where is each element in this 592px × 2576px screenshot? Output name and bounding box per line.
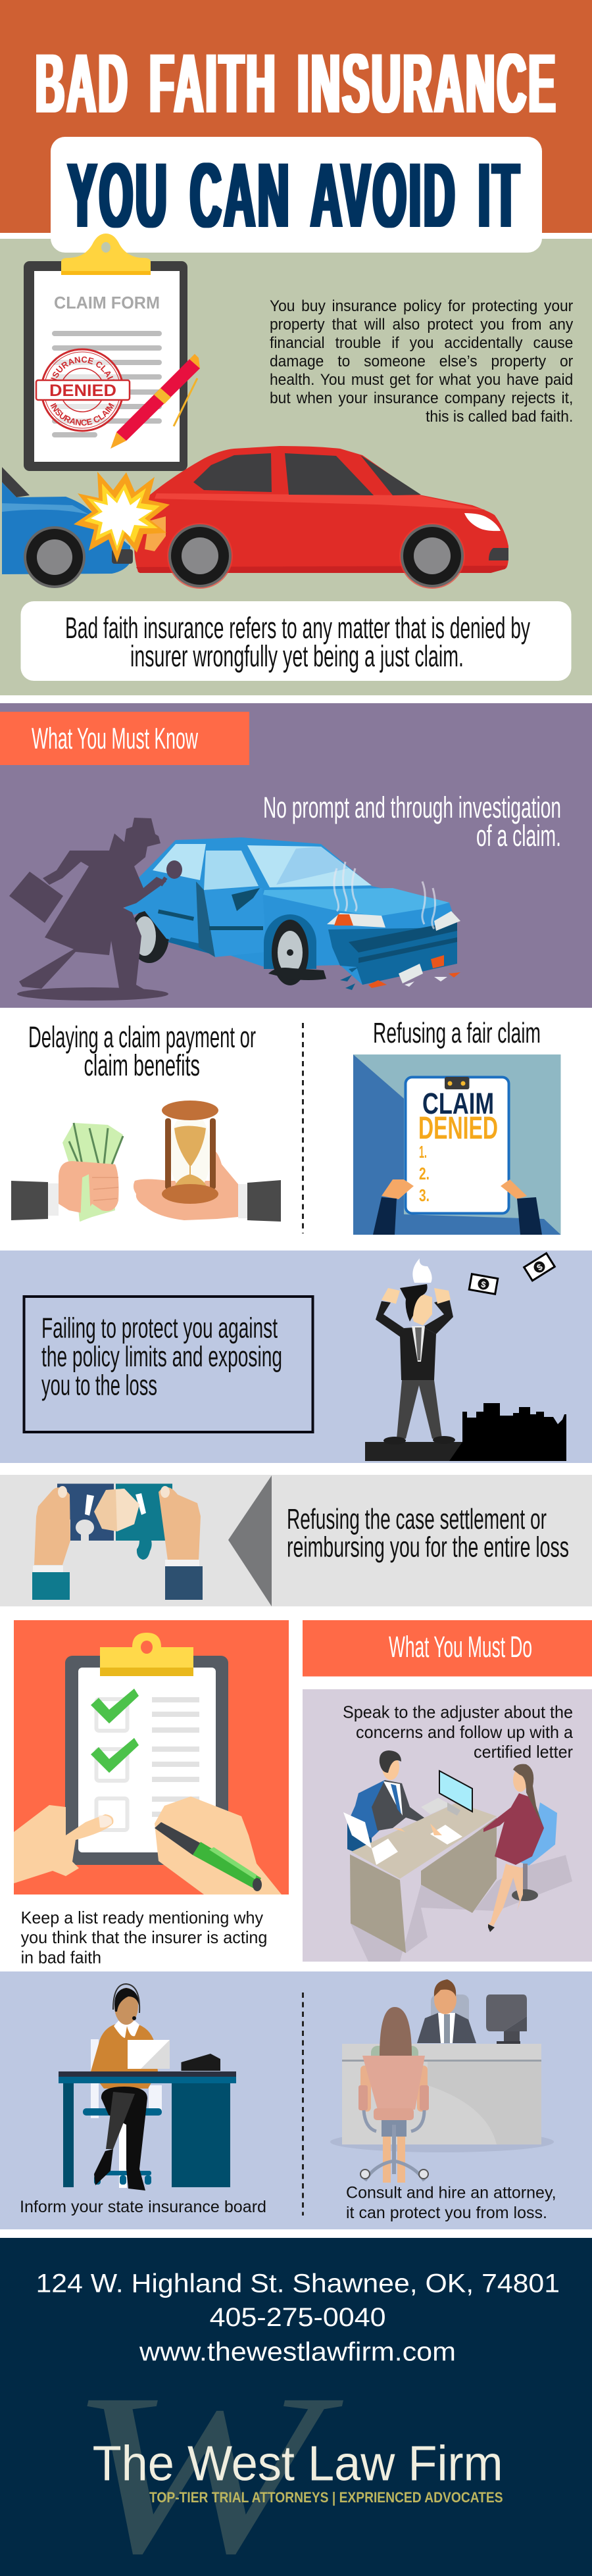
adjuster text: concerns and follow up with a — [356, 1722, 574, 1742]
contact details: 124 W. Highland St. Shawnee, OK, 74801 — [36, 2269, 560, 2298]
callout box: Failing to protect you against — [41, 1312, 278, 1345]
icon: woman at desk — [59, 1984, 236, 2191]
contact details: www.thewestlawfirm.com — [139, 2338, 456, 2367]
icon: blue car — [2, 467, 133, 588]
list caption: in bad faith — [21, 1948, 101, 1968]
icon: claim denied board — [353, 1054, 560, 1235]
icon: claim denied board: DENIED — [418, 1111, 498, 1146]
delay heading: Delaying a claim payment or — [28, 1020, 256, 1054]
adjuster text: Speak to the adjuster about the — [343, 1702, 573, 1721]
panel: footer — [0, 2238, 592, 2576]
consult caption: Consult and hire an attorney, — [346, 2184, 556, 2202]
panel: claim form and car crash — [0, 137, 592, 695]
icon: office meeting — [343, 1750, 572, 1962]
adjuster text: certified letter — [474, 1742, 573, 1762]
logo: tagline: TOP-TIER TRIAL ATTORNEYS | EXPRIENCED ADVOCATES — [149, 2489, 503, 2506]
icon: claim denied board: 2. — [419, 1164, 430, 1183]
icon: flying banknotes: $ — [535, 1262, 545, 1273]
icon: denied stamp — [36, 349, 130, 432]
contact details — [36, 2269, 560, 2367]
section heading — [303, 1620, 592, 1676]
intro text: You buy insurance policy for protecting your — [270, 297, 573, 315]
icon: claim denied board: 1. — [419, 1142, 427, 1162]
intro text: health. You must get for what you have paid — [270, 371, 573, 389]
panel: what you must do — [303, 1620, 592, 1962]
icon: red car — [134, 446, 508, 589]
icon: hand with money — [11, 1123, 123, 1222]
arrow: grey triangle — [228, 1475, 272, 1606]
icon: clipboard checklist — [65, 1633, 228, 1865]
inform caption: Inform your state insurance board — [20, 2198, 266, 2216]
section heading — [0, 712, 249, 765]
panel: keep a list — [14, 1620, 289, 1968]
adjuster text — [343, 1702, 574, 1762]
icon: flying banknotes — [469, 1253, 555, 1294]
icon: detective silhouette — [9, 818, 182, 1001]
panel: what you must know — [0, 703, 592, 1008]
list caption: you think that the insurer is acting — [21, 1927, 267, 1947]
settlement text — [287, 1503, 569, 1563]
callout box — [24, 1297, 313, 1432]
icon: clipboard claim form: CLAIM FORM — [54, 293, 160, 312]
header panel — [0, 0, 592, 233]
panel: refusing settlement — [0, 1475, 592, 1606]
icon: wrecked blue car — [121, 837, 460, 990]
intro text — [270, 297, 592, 429]
icon: denied stamp: DENIED — [49, 382, 116, 400]
intro text: property that will also protect you from any — [270, 316, 573, 334]
icon: claim denied board: 3. — [419, 1185, 430, 1205]
delay heading: claim benefits — [84, 1049, 200, 1082]
icon: denied stamp: INSURANCE CLAIM — [51, 357, 114, 380]
investigation text — [263, 791, 561, 853]
consult caption: it can protect you from loss. — [346, 2204, 547, 2222]
divider: dashed line — [302, 1993, 304, 2216]
divider: dashed line — [302, 1023, 304, 1233]
icon: collision burst — [74, 472, 170, 562]
icon: hands with pen — [14, 1796, 282, 1895]
panel: refusing a fair claim — [353, 1017, 560, 1235]
icon: pen — [111, 354, 200, 449]
panel: delaying a claim payment — [11, 1020, 281, 1222]
icon: attorney consultation — [330, 1979, 554, 2183]
list caption — [21, 1908, 267, 1968]
list caption: Keep a list ready mentioning why — [21, 1908, 263, 1927]
icon: flying banknotes: $ — [480, 1279, 487, 1290]
icon: hand with hourglass — [134, 1101, 281, 1222]
icon: denied stamp: INSURANCE CLAIM — [50, 403, 114, 426]
callout box: the policy limits and exposing — [41, 1341, 282, 1373]
logo: firm name: The West Law Firm — [93, 2436, 503, 2491]
icon: stressed businessman — [365, 1253, 566, 1461]
intro text: but when your insurance company rejects it, — [270, 389, 573, 407]
icon: clipboard claim form — [24, 234, 187, 471]
consult caption — [346, 2184, 556, 2222]
icon: claim denied board: CLAIM — [422, 1087, 494, 1120]
intro text: financial trouble if you accidentally cause — [270, 334, 573, 352]
panel: inform and consult — [0, 1971, 592, 2229]
icon: puzzle handshake — [32, 1484, 203, 1600]
delay heading — [28, 1020, 256, 1082]
intro text: this is called bad faith. — [426, 408, 573, 426]
section heading: What You Must Know — [32, 722, 198, 755]
definition card — [21, 601, 571, 681]
panel: failing to protect — [0, 1251, 592, 1463]
intro text: damage to someone else’s property or — [270, 353, 573, 370]
callout box: you to the loss — [41, 1370, 157, 1401]
contact details: 405-275-0040 — [210, 2303, 386, 2332]
